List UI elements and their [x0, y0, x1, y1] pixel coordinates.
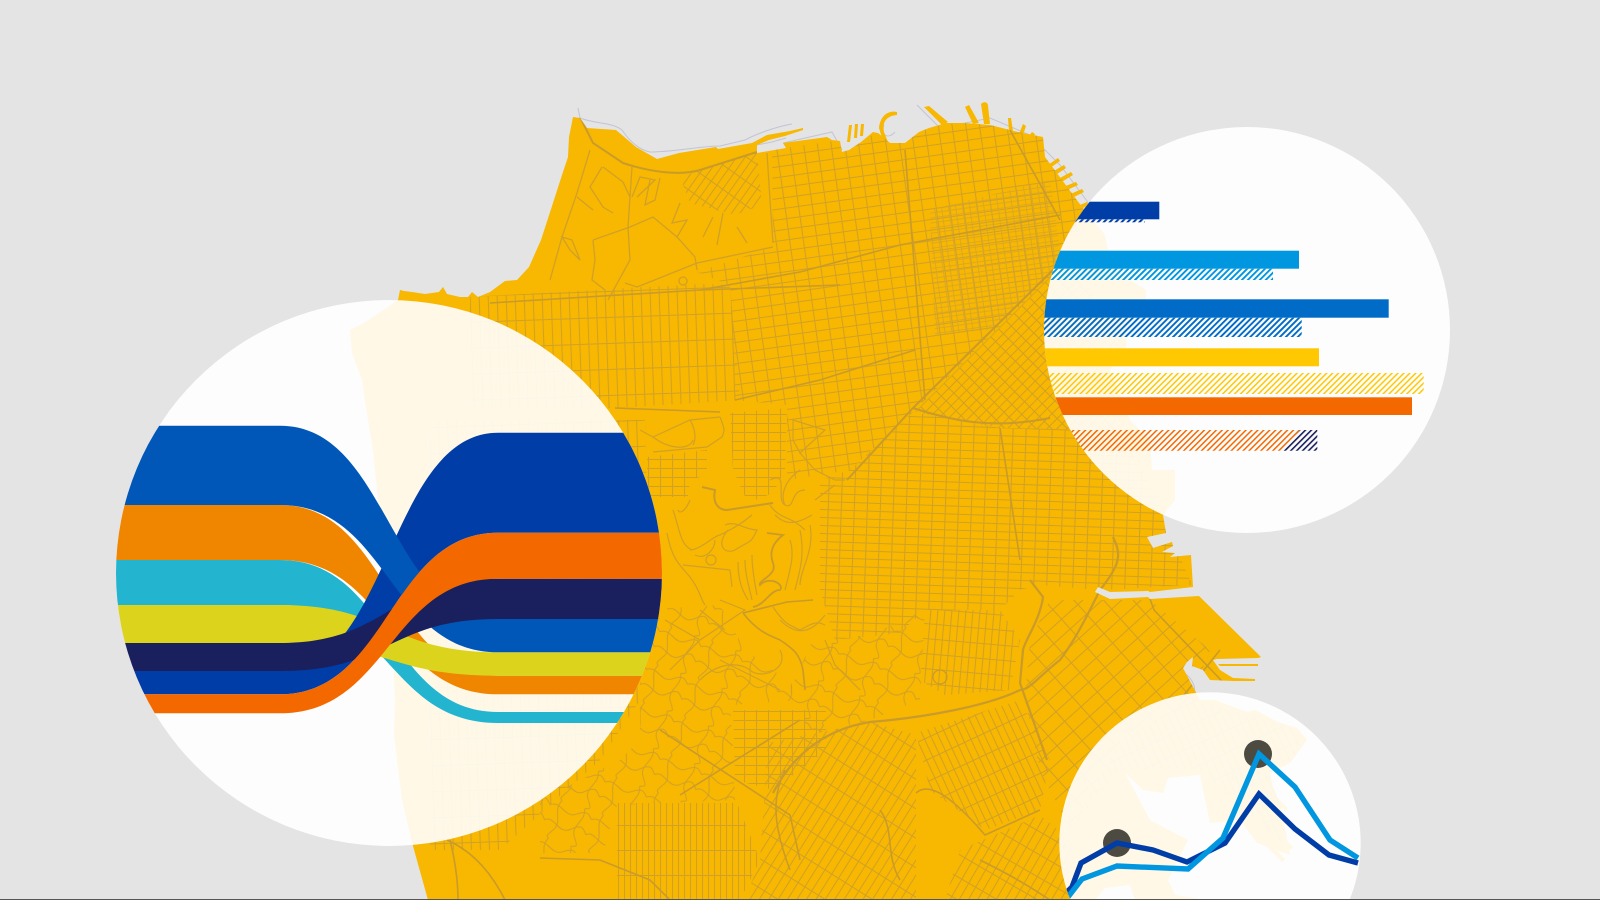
flow: dark blue — [116, 433, 662, 694]
paired bars — [1044, 202, 1424, 451]
piers — [847, 102, 1293, 862]
line chart — [1066, 754, 1358, 897]
bar pair: orange — [1044, 397, 1412, 451]
flow: cyan — [116, 560, 662, 723]
Bernal Heights grid — [920, 610, 1020, 695]
Mission grid — [820, 412, 1192, 640]
panel: line chart circle — [1059, 692, 1361, 900]
bottom rule — [0, 899, 1600, 900]
white translucent circle cut at the page edge — [1059, 692, 1361, 900]
panel: bar chart circle — [1044, 127, 1450, 533]
SoMa diagonal grid — [915, 276, 1069, 430]
line: dark blue — [1066, 794, 1358, 893]
Cole Valley grid — [730, 408, 787, 503]
Forest Hill curving streets — [640, 605, 800, 740]
flow: navy — [116, 579, 662, 671]
marker: peak dot — [1244, 740, 1272, 768]
sankey flows — [116, 426, 662, 723]
flow: blue — [116, 426, 662, 652]
Richmond grid — [470, 284, 740, 410]
Parnassus grid — [647, 450, 707, 497]
Twin Peaks hand-traced roads — [640, 417, 860, 690]
St Francis Wood curving streets — [540, 705, 735, 853]
Visitacion grid — [946, 817, 1068, 899]
flow: lime — [116, 605, 662, 676]
street network — [430, 110, 1300, 900]
line: cyan — [1068, 754, 1358, 897]
bar pair: blue — [1044, 299, 1389, 337]
Diamond Heights curving streets — [790, 610, 925, 735]
land fill — [350, 117, 1307, 900]
Presidio roads — [550, 150, 773, 300]
white translucent circle — [116, 300, 662, 846]
Presidio Heights grid — [680, 153, 762, 215]
bay inlet near bottom — [1095, 885, 1135, 900]
Ingleside grid — [617, 803, 760, 900]
bar pair: cyan — [1044, 251, 1299, 280]
central grid south — [733, 710, 826, 790]
white translucent circle — [1044, 127, 1450, 533]
Western Addition and Pacific Heights grid — [697, 110, 1090, 480]
faint shoreline roads outside the land — [578, 105, 1195, 700]
major roads — [447, 117, 1240, 900]
marker: left dot — [1103, 829, 1131, 857]
flow: orange red — [116, 533, 662, 713]
Bayview grid — [1025, 600, 1210, 830]
Sunset grid — [430, 420, 647, 850]
map: San Francisco — [350, 102, 1307, 900]
Portola grid — [916, 700, 1050, 830]
bar pair: dark blue — [1075, 202, 1160, 222]
panel: sankey circle — [116, 300, 662, 846]
flow: orange — [116, 505, 662, 694]
bar pair: yellow — [1044, 348, 1424, 394]
downtown fine grid — [930, 180, 1062, 335]
pale bayside grid — [1070, 700, 1300, 850]
Excelsior diagonal grid — [745, 722, 916, 900]
